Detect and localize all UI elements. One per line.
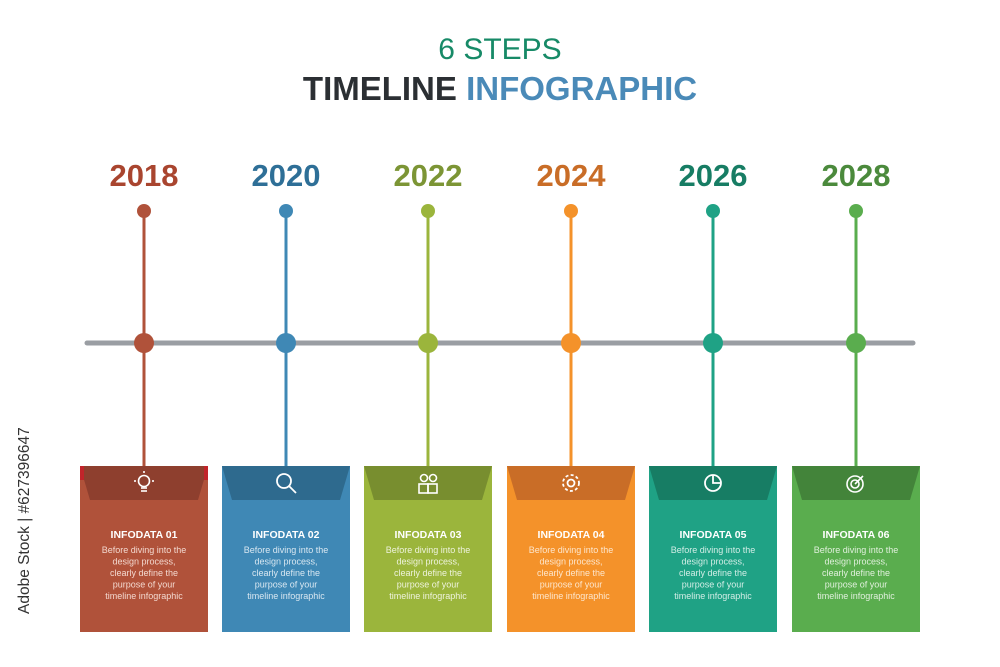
step 6: design process, bbox=[824, 556, 888, 566]
step 5: clearly define the bbox=[679, 568, 747, 578]
step 3: Before diving into the bbox=[386, 545, 470, 555]
step 3: purpose of your bbox=[397, 580, 459, 590]
step 3: clearly define the bbox=[394, 568, 462, 578]
step 3: 2022 bbox=[394, 158, 462, 193]
step 1: timeline infographic bbox=[105, 591, 183, 601]
icon: people bbox=[419, 474, 437, 493]
step 2: design process, bbox=[254, 556, 318, 566]
step 6 bbox=[792, 158, 920, 632]
step 1: clearly define the bbox=[110, 568, 178, 578]
step 6: purpose of your bbox=[825, 580, 887, 590]
step 1: INFODATA 01 bbox=[111, 529, 178, 541]
step 2: clearly define the bbox=[252, 568, 320, 578]
step 2: 2020 bbox=[252, 158, 320, 193]
step 5 bbox=[649, 158, 777, 632]
step 2: Before diving into the bbox=[244, 545, 328, 555]
icon: gear bbox=[563, 475, 579, 491]
step 2: timeline infographic bbox=[247, 591, 325, 601]
step 4: design process, bbox=[539, 556, 603, 566]
icon: pie bbox=[705, 475, 721, 491]
title: 6 STEPS bbox=[438, 33, 562, 66]
step 4: Before diving into the bbox=[529, 545, 613, 555]
step 5: timeline infographic bbox=[674, 591, 752, 601]
step 1: design process, bbox=[112, 556, 176, 566]
step 4 bbox=[507, 158, 635, 632]
step 6: timeline infographic bbox=[817, 591, 895, 601]
step 4: timeline infographic bbox=[532, 591, 610, 601]
step 3 bbox=[364, 158, 492, 632]
step 6: 2028 bbox=[822, 158, 890, 193]
step 1: Before diving into the bbox=[102, 545, 186, 555]
step 4: purpose of your bbox=[540, 580, 602, 590]
step 3: design process, bbox=[396, 556, 460, 566]
step 3: timeline infographic bbox=[389, 591, 467, 601]
step 4: 2024 bbox=[537, 158, 606, 193]
step 4: clearly define the bbox=[537, 568, 605, 578]
title: TIMELINE INFOGRAPHIC bbox=[303, 70, 697, 107]
step 2: INFODATA 02 bbox=[253, 529, 320, 541]
step 5: 2026 bbox=[679, 158, 747, 193]
icon: bulb bbox=[134, 471, 154, 491]
step 2: purpose of your bbox=[255, 580, 317, 590]
step 1: 2018 bbox=[110, 158, 178, 193]
icon: search bbox=[277, 474, 296, 493]
step 2 bbox=[222, 158, 350, 632]
step 6: clearly define the bbox=[822, 568, 890, 578]
step 6: Before diving into the bbox=[814, 545, 898, 555]
icon: target bbox=[847, 476, 863, 492]
step 5: purpose of your bbox=[682, 580, 744, 590]
step 1: purpose of your bbox=[113, 580, 175, 590]
step 5: Before diving into the bbox=[671, 545, 755, 555]
timeline axis bbox=[87, 340, 913, 346]
step 5: design process, bbox=[681, 556, 745, 566]
side caption: Adobe Stock | #627396647 bbox=[16, 427, 33, 614]
title bbox=[303, 33, 697, 107]
step 4: INFODATA 04 bbox=[538, 529, 605, 541]
step 3: INFODATA 03 bbox=[395, 529, 462, 541]
step 1 bbox=[80, 158, 208, 632]
step 6: INFODATA 06 bbox=[823, 529, 890, 541]
step 5: INFODATA 05 bbox=[680, 529, 747, 541]
